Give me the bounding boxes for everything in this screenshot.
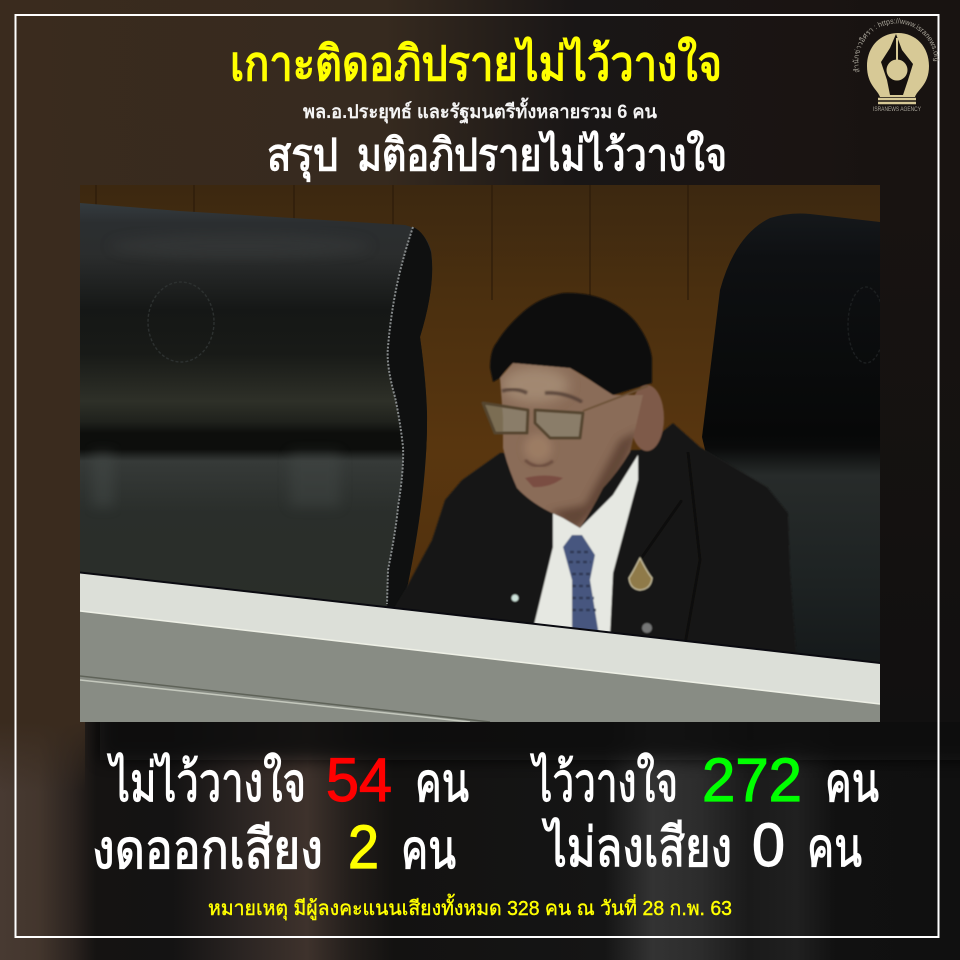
title: เกาะติดอภิปรายไม่ไว้วางใจ [230,35,722,91]
confidence unit: คน [825,753,879,813]
not voting number: 0 [752,811,785,879]
no confidence unit: คน [415,753,469,813]
nose shadow [525,460,553,466]
eyebrows [502,389,582,402]
tie [563,535,599,635]
abstain label: งดออกเสียง [92,820,323,880]
face [498,362,642,528]
desk [80,572,880,722]
glasses [483,386,648,438]
confidence label: ไว้วางใจ [530,752,678,813]
footnote: หมายเหตุ มีผู้ลงคะแนนเสียงทั้งหมด 328 คน ณ วันที่ 28 ก.พ. 63 [208,894,732,921]
ear [630,385,664,451]
not voting label: ไม่ลงเสียง [542,817,732,878]
suit [390,423,797,665]
icon: pen nib bulb [867,33,929,103]
subtitle: พล.อ.ประยุทธ์ และรัฐมนตรีทั้งหลายรวม 6 คน [303,97,657,125]
abstain unit: คน [401,820,456,880]
jacket seams [640,452,700,650]
vote: confidence 272 [530,746,879,814]
small pin [642,623,652,633]
confidence number: 272 [702,746,802,814]
wood panelling [80,185,880,586]
vote: abstain 2 [92,813,456,881]
heading words: no-confidence resolution: มติอภิปรายไม่ไว้วางใจ [357,129,727,180]
right chair [702,214,884,680]
vote: no confidence 54 [107,746,469,814]
logo url arc: สำนักข่าวอิศรา : https://www.isranews.org [852,18,938,72]
left chair [80,203,432,620]
logo caption: ISRANEWS AGENCY [873,107,921,113]
mouth [525,476,563,487]
photo: parliament chamber [80,185,884,722]
hair [490,293,652,395]
abstain number: 2 [348,813,379,881]
vote: not voting 0 [542,811,862,879]
heading word: summary: สรุป [267,131,338,183]
no confidence label: ไม่ไว้วางใจ [107,752,306,813]
suit button [512,594,518,602]
summary heading [267,129,727,183]
speaker [390,293,797,665]
not voting unit: คน [807,818,862,878]
shirt [534,455,638,635]
no confidence number: 54 [326,746,392,814]
logo: Isranews Agency [852,18,938,113]
lapel pin [629,558,652,590]
